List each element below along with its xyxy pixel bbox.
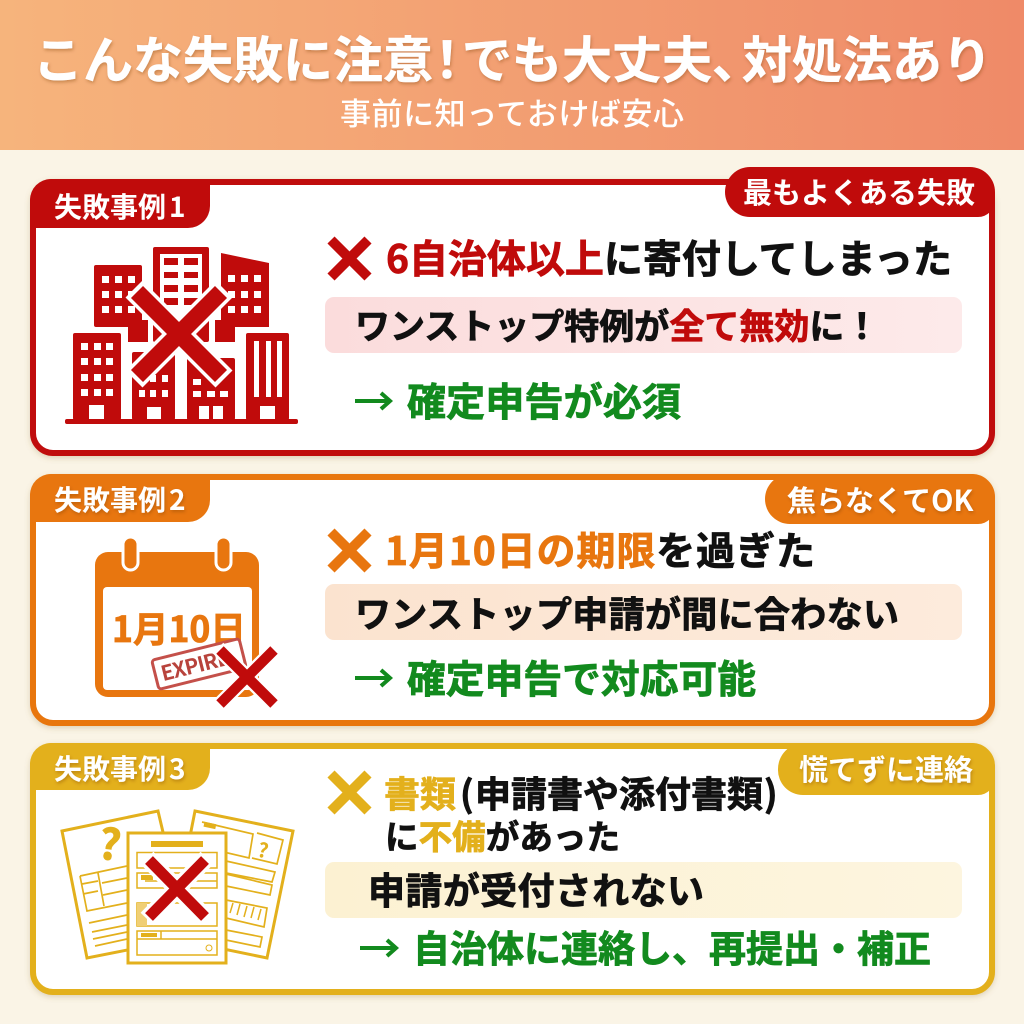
heading: case 3 line 1: )	[764, 766, 778, 818]
panel: failure case 2	[30, 474, 995, 723]
title: でも大丈夫、	[462, 21, 762, 93]
tab: do not panic	[765, 474, 995, 524]
tab: case 3 label: 失敗事例3	[54, 748, 186, 788]
icon: documents crossed out: ?	[255, 834, 271, 864]
header band	[0, 0, 1024, 150]
highlight: not accepted: 申請が受付されない	[368, 861, 704, 915]
highlight: application too late: ワンストップ申請が間に合わない	[355, 586, 899, 638]
action: contact municipality: 自治体に連絡し、再提出・補正	[413, 919, 931, 973]
title: こんな失敗に注意	[33, 21, 433, 93]
icon: expired calendar: EXPIRE	[158, 642, 233, 688]
tab: case 2 label: 失敗事例2	[54, 479, 186, 519]
icon: green arrow	[355, 670, 390, 686]
heading: case 3 line 1: (	[460, 766, 474, 818]
highlight: not accepted	[325, 861, 962, 918]
icon: documents crossed out: ?	[95, 811, 125, 874]
panel: failure case 3	[30, 743, 995, 992]
tab: case 1 label	[30, 179, 210, 228]
action: tax return possible: 確定申告で対応可能	[407, 649, 756, 705]
title: ！	[422, 21, 472, 93]
icon: X mark	[331, 774, 368, 811]
icon: green arrow	[360, 940, 396, 956]
highlight: all invalid: ワンストップ特例が全て無効に！	[355, 299, 879, 350]
heading: case 3 line 2: に不備があった	[385, 810, 620, 859]
tab: case 1 label: 失敗事例1	[54, 186, 186, 226]
icon: X mark	[331, 240, 368, 277]
icon: expired calendar: 1月10日	[112, 602, 246, 653]
heading: case 1: 6自治体以上に寄付してしまった	[386, 229, 952, 285]
tab: most common failure: 最もよくある失敗	[743, 170, 975, 212]
icon: buildings crossed out	[65, 247, 298, 424]
icon: green arrow	[355, 393, 390, 409]
heading: case 3 line 1: 書類	[384, 766, 456, 818]
tab: contact without panic	[778, 743, 995, 795]
tab: do not panic: 焦らなくてOK	[787, 478, 973, 520]
title: 対処法あり	[742, 21, 992, 93]
icon: X mark	[331, 532, 368, 569]
tab: case 2 label	[30, 474, 210, 522]
heading: case 3 line 1: 申請書や添付書類	[475, 766, 763, 818]
heading: case 2: 1月10日の期限を過ぎた	[385, 521, 815, 577]
tab: contact without panic: 慌てずに連絡	[799, 747, 973, 789]
icon: documents crossed out	[62, 811, 293, 963]
action: tax return required: 確定申告が必須	[407, 372, 681, 428]
subtitle: 事前に知っておけば安心	[340, 89, 684, 134]
tab: case 3 label	[30, 743, 210, 790]
panel: failure case 1	[30, 167, 995, 453]
icon: expired calendar	[95, 537, 276, 706]
